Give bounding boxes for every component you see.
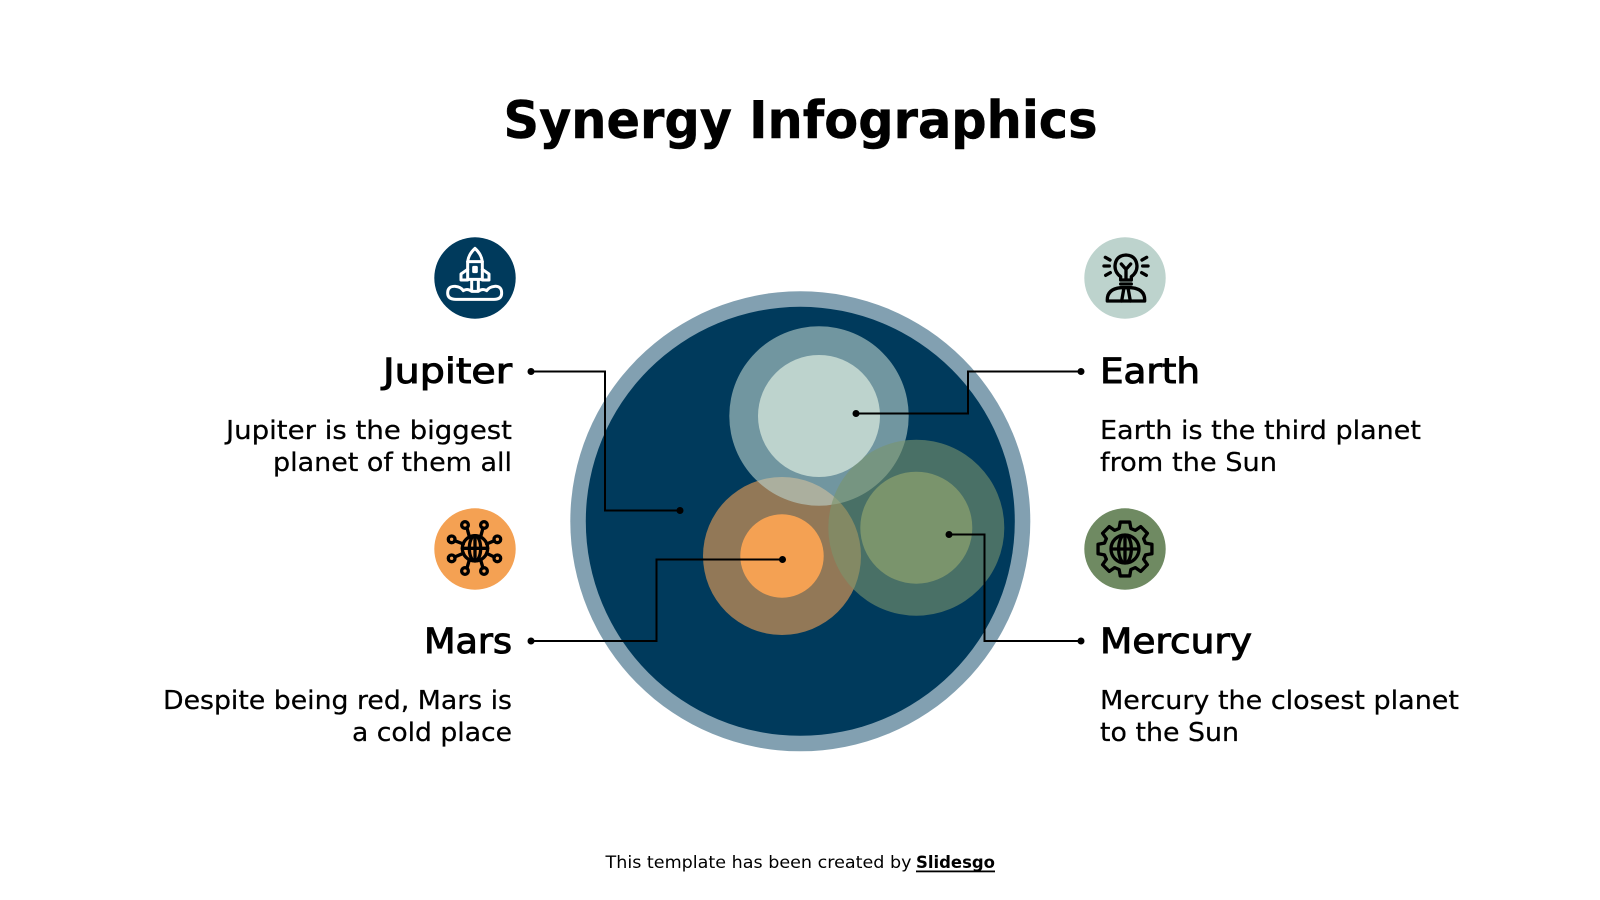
text block: Jupiter: Jupiter: [381, 352, 513, 392]
text block: Jupiter: Jupiter is the biggest: [224, 416, 512, 446]
footer credit: Slidesgo: [916, 853, 995, 873]
text block: Mars: [163, 622, 512, 748]
icon: lightbulb person: [1084, 237, 1166, 319]
connector: Mars: [528, 556, 786, 644]
text block: Mercury: to the Sun: [1100, 718, 1239, 748]
text block: Mercury: Mercury the closest planet: [1100, 686, 1459, 716]
connector: Mercury: [946, 531, 1084, 644]
text block: Earth: Earth: [1100, 352, 1200, 392]
connector: Jupiter: [528, 368, 684, 514]
green core: [860, 472, 972, 584]
icon: gear globe: [1084, 508, 1166, 590]
outer ring: [570, 291, 1030, 751]
icon: network globe: [434, 508, 516, 590]
text block: Earth: from the Sun: [1100, 448, 1277, 478]
pale core: [758, 355, 880, 477]
text block: Jupiter: [224, 352, 513, 478]
title: Synergy Infographics: [504, 91, 1098, 151]
text block: Mercury: Mercury: [1100, 622, 1252, 662]
text block: Jupiter: planet of them all: [273, 448, 512, 478]
text block: Mars: Despite being red, Mars is: [163, 686, 512, 716]
footer credit: This template has been created by: [604, 853, 912, 873]
orange halo: [703, 477, 861, 635]
pale halo: [729, 326, 909, 506]
navy disc: [586, 307, 1015, 736]
text block: Mars: Mars: [424, 622, 512, 662]
diagram: overlapping circles: [570, 291, 1030, 751]
text block: Earth: Earth is the third planet: [1100, 416, 1421, 446]
text block: Mars: a cold place: [352, 718, 512, 748]
connector: Earth: [852, 368, 1084, 417]
text block: Mercury: [1100, 622, 1459, 748]
text block: Earth: [1100, 352, 1421, 478]
orange core: [740, 514, 824, 598]
green halo: [828, 440, 1004, 616]
icon: rocket: [434, 237, 516, 319]
